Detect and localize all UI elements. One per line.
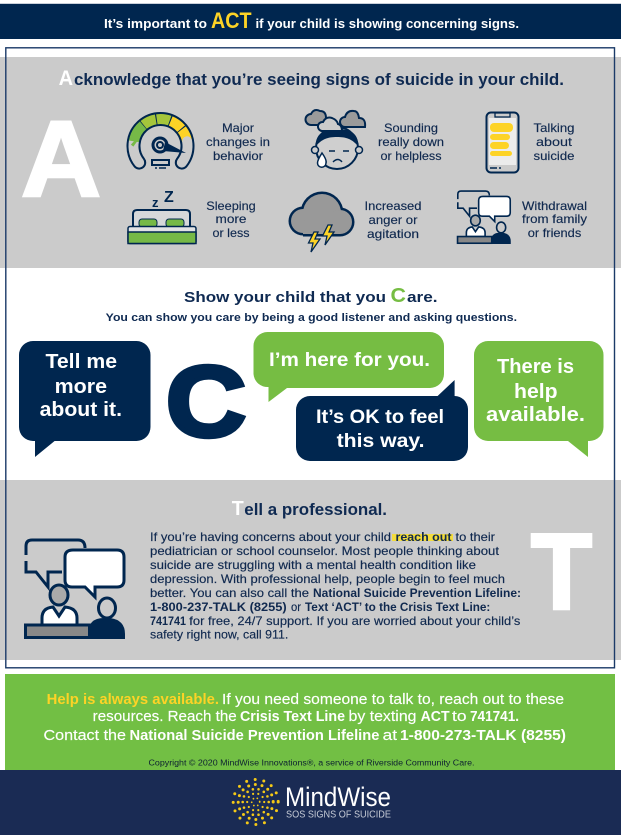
- label: sounding down: really down: [378, 135, 444, 149]
- label: anger: anger or: [368, 213, 418, 227]
- label: sounding down: [378, 121, 444, 163]
- body text: reach out: [396, 531, 452, 544]
- logo: wordmark: MindWise: [285, 782, 391, 812]
- panel: care: [19, 285, 604, 461]
- label: major changes: changes in: [206, 135, 270, 149]
- body text: 741741: [150, 615, 187, 628]
- speech bubble: help available: There is: [497, 355, 574, 378]
- heading: acknowledge: A: [59, 67, 73, 90]
- body text: If you’re having concerns about your child: [150, 530, 391, 544]
- icon: speedometer: [133, 119, 188, 168]
- body text: pediatrician or school counselor. Most people thinking about: [150, 544, 500, 558]
- heading: care: Show your child that you: [184, 289, 386, 306]
- label: sounding down: or helpless: [380, 149, 442, 163]
- icon: two people talking: [26, 540, 125, 639]
- label: talking about suicide: [534, 121, 575, 163]
- subheading: You can show you care by being a good listener and asking questions.: [106, 312, 517, 324]
- logo: sunburst dots: [233, 780, 278, 824]
- heading: tell: T: [232, 498, 244, 520]
- speech bubble: tell me more: [19, 341, 150, 457]
- speech bubble: tell me more: Tell me: [46, 350, 117, 373]
- icon: sad child under clouds: [306, 110, 365, 169]
- resources text: to: [452, 709, 466, 725]
- icon: phone: [486, 112, 518, 172]
- label: withdrawal: [522, 199, 587, 240]
- footer: [0, 770, 621, 835]
- top banner: [0, 4, 621, 39]
- large letter A: A: [21, 98, 101, 219]
- label: major changes: Major: [222, 121, 254, 135]
- speech bubble: tell me more: about it.: [40, 398, 122, 421]
- body text: depression. With professional help, people begin to feel much: [150, 572, 505, 586]
- body text: [150, 530, 521, 642]
- label: major changes: behavior: [213, 149, 263, 163]
- label: sleeping: more: [216, 212, 247, 226]
- panel: help resources: [5, 674, 615, 771]
- label: talking about suicide: about: [536, 135, 573, 149]
- label: withdrawal: Withdrawal: [522, 199, 587, 213]
- label: major changes: [206, 121, 270, 163]
- panel: acknowledge: [0, 57, 621, 268]
- label: sleeping: [206, 199, 256, 240]
- speech bubble: ok to feel: [296, 380, 468, 461]
- body text: for free, 24/7 support. If you are worried about your child’s: [189, 614, 520, 628]
- copyright: Copyright © 2020 MindWise Innovations®, a service of Riverside Community Care.: [148, 759, 474, 768]
- resources text: [44, 692, 566, 744]
- panel: tell a professional: [0, 480, 621, 660]
- resources text: If you need someone to talk to, reach out to these: [222, 692, 564, 708]
- resources text: at: [383, 728, 397, 744]
- resources text: by texting: [348, 709, 416, 725]
- top banner: if your child is showing concerning signs.: [256, 16, 519, 31]
- large letter T: T: [531, 510, 592, 632]
- label: anger: Increased: [364, 199, 422, 213]
- body text: National Suicide Prevention Lifeline:: [313, 587, 521, 600]
- speech bubble: ok to feel: this way.: [337, 430, 424, 452]
- resources text: Help is always available.: [47, 692, 219, 708]
- body text: or: [291, 600, 301, 614]
- speech bubble: help available: [474, 341, 604, 457]
- large letter C: C: [166, 346, 246, 458]
- label: sleeping: Sleeping: [206, 199, 256, 213]
- speech bubble: tell me more: more: [55, 375, 107, 398]
- speech bubble: ok to feel: It’s OK to feel: [316, 406, 444, 428]
- speech bubble: here for you: I’m here for you.: [269, 349, 430, 371]
- label: talking about suicide: suicide: [534, 149, 575, 163]
- outer frame: [6, 48, 615, 668]
- label: talking about suicide: Talking: [534, 121, 574, 135]
- icon: bed: Z: [164, 189, 174, 206]
- speech bubble: help available: available.: [486, 403, 585, 426]
- body text: suicide are struggling with a mental health condition like: [150, 558, 476, 572]
- resources text: resources. Reach the: [93, 709, 237, 725]
- icon: bed: z: [152, 195, 159, 210]
- body text: better. You can also call the: [150, 586, 309, 600]
- top banner: ACT: [211, 8, 252, 33]
- label: withdrawal: from family: [522, 212, 587, 226]
- logo: tagline: SOS SIGNS OF SUICIDE: [286, 810, 391, 821]
- icon: storm cloud: [288, 192, 354, 252]
- heading: care: C: [390, 285, 406, 307]
- heading: acknowledge: cknowledge that you’re seeing signs of suicide in your child.: [74, 70, 564, 89]
- label: withdrawal: or friends: [528, 226, 581, 240]
- resources text: Contact the: [44, 728, 126, 744]
- label: anger: agitation: [367, 227, 419, 241]
- resources text: ACT: [421, 709, 450, 725]
- resources text: National Suicide Prevention Lifeline: [130, 728, 379, 744]
- heading: care: [184, 285, 438, 307]
- heading: tell: ell a professional.: [244, 500, 387, 519]
- body text: 1-800-237-TALK (8255): [150, 601, 287, 614]
- speech bubble: help available: help: [514, 380, 558, 403]
- heading: care: are.: [407, 289, 438, 306]
- speech bubble: here for you: [254, 332, 444, 402]
- resources text: 741741.: [470, 709, 519, 725]
- body text: Text ‘ACT’ to the Crisis Text Line:: [305, 601, 490, 614]
- icon: two people talking small: [458, 191, 511, 244]
- body text: safety right now, call 911.: [150, 628, 288, 642]
- top banner: It’s important to: [104, 16, 207, 31]
- body text: to their: [456, 530, 495, 544]
- resources text: 1-800-273-TALK (8255): [400, 728, 566, 744]
- label: anger: [364, 199, 422, 241]
- label: sleeping: or less: [212, 226, 250, 240]
- resources text: Crisis Text Line: [240, 709, 345, 725]
- icon: bed: [128, 189, 196, 244]
- label: sounding down: Sounding: [384, 121, 438, 135]
